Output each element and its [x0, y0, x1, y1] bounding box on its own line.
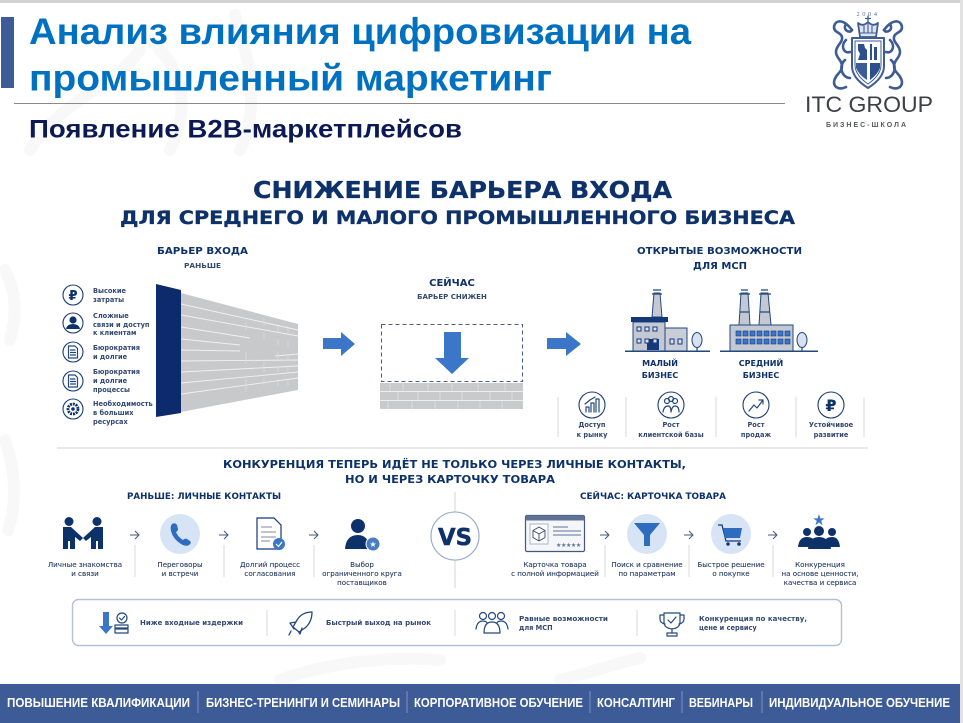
icon: team with star	[798, 511, 840, 549]
icon: funnel	[627, 514, 667, 554]
barrier list: связи и доступ	[93, 321, 149, 329]
now heading: СЕЙЧАС	[429, 276, 475, 289]
icon: medium factory	[720, 290, 818, 352]
dashed outline of old barrier	[382, 324, 522, 382]
panel: before, personal contacts	[48, 492, 402, 587]
small business label: БИЗНЕС	[642, 371, 678, 380]
benefits row: ₽	[825, 396, 837, 415]
step captions: качества и сервиса	[784, 578, 856, 587]
step captions: поставщиков	[337, 578, 387, 587]
step captions: согласования	[244, 569, 296, 578]
footer bar	[0, 684, 960, 723]
logo: ITC GROUP: ITC GROUP	[805, 92, 933, 117]
text: lower costs: Ниже входные издержки	[140, 619, 243, 627]
text: equal opportunities: Равные возможности	[519, 615, 608, 623]
step captions: Конкуренция	[795, 560, 845, 569]
step captions: о покупке	[712, 569, 750, 578]
VS badge: VS	[438, 525, 472, 551]
low brick wall	[380, 383, 523, 409]
step captions: Карточка товара	[523, 560, 587, 569]
infographic	[48, 176, 868, 646]
step separators	[605, 545, 773, 577]
panel: now, product card	[511, 490, 858, 587]
benefits row: Доступ	[578, 421, 606, 429]
footer bar: ИНДИВИДУАЛЬНОЕ ОБУЧЕНИЕ	[769, 696, 950, 710]
step separators	[135, 545, 314, 577]
text: quality competition: цене и сервису	[699, 624, 757, 632]
opportunities heading: ОТКРЫТЫЕ ВОЗМОЖНОСТИ	[637, 246, 802, 257]
step captions: и связи	[71, 569, 99, 578]
benefits row: Устойчивое	[809, 421, 854, 429]
benefits row: Рост	[662, 421, 680, 429]
competition heading: КОНКУРЕНЦИЯ ТЕПЕРЬ ИДЁТ НЕ ТОЛЬКО ЧЕРЕЗ ЛИЧНЫЕ КОНТАКТЫ,	[223, 457, 686, 471]
background watermark	[5, 15, 640, 680]
infographic panel	[26, 162, 870, 652]
logo: ITC GROUP	[805, 11, 933, 129]
barrier list: Высокие	[93, 287, 127, 295]
competition heading: НО И ЧЕРЕЗ КАРТОЧКУ ТОВАРА	[345, 474, 556, 486]
step captions: Быстрое решение	[697, 560, 765, 569]
logo: ITC GROUP: 2004	[856, 11, 880, 18]
footer bar: ПОВЫШЕНИЕ КВАЛИФИКАЦИИ	[7, 696, 190, 710]
icon: product card window: ★★★★★	[556, 542, 581, 549]
icon: phone	[160, 514, 200, 554]
right edge	[960, 0, 963, 723]
arrow: before to now	[323, 332, 355, 356]
benefits row	[558, 392, 864, 439]
barrier list: и долгие	[93, 353, 128, 361]
section divider	[57, 447, 868, 449]
icon: equal opportunities	[476, 612, 508, 633]
barrier list: в больших	[93, 409, 134, 417]
benefits row: развитие	[814, 431, 849, 439]
step captions: Долгий процесс	[240, 560, 300, 569]
subtitle: Появление B2B-маркетплейсов	[29, 116, 462, 144]
barrier list: процессы	[93, 386, 130, 394]
arrow: now to opportunities	[547, 332, 581, 356]
footer bar: КОРПОРАТИВНОЕ ОБУЧЕНИЕ	[414, 696, 583, 710]
benefits row: Рост	[747, 421, 765, 429]
before heading: РАНЬШЕ: ЛИЧНЫЕ КОНТАКТЫ	[127, 492, 281, 502]
barrier list: Сложные	[93, 312, 129, 320]
panel: barrier now	[380, 276, 523, 409]
summary box	[72, 600, 842, 646]
benefits row: клиентской базы	[638, 431, 704, 439]
barrier sublabel: РАНЬШЕ	[184, 261, 221, 270]
panel: barrier before	[63, 246, 298, 426]
benefits row: продаж	[741, 431, 772, 439]
step captions: Поиск и сравнение	[611, 560, 683, 569]
barrier list	[63, 285, 153, 426]
step captions: ограниченного круга	[322, 569, 402, 578]
opportunities heading line 2: ДЛЯ МСП	[693, 261, 747, 272]
barrier list: ₽	[68, 289, 78, 304]
icon: team with star: ★	[812, 511, 826, 529]
logo: ITC GROUP: БИЗНЕС-ШКОЛА	[826, 122, 906, 129]
text: fast market entry: Быстрый выход на рынок	[326, 619, 432, 627]
flow arrows	[600, 531, 777, 539]
step captions: по параметрам	[618, 569, 676, 578]
barrier list: и долгие	[93, 377, 128, 385]
VS badge	[431, 492, 479, 588]
barrier list: ресурсах	[93, 418, 128, 426]
small business label: МАЛЫЙ	[642, 357, 678, 368]
panel: open opportunities	[558, 246, 864, 439]
medium business label: СРЕДНИЙ	[739, 357, 783, 368]
step captions: с полной информацией	[511, 569, 599, 578]
icon: handshake	[63, 517, 103, 549]
step captions: Личные знакомства	[48, 560, 122, 569]
step captions: Переговоры	[157, 560, 203, 569]
footer bar: ВЕБИНАРЫ	[689, 696, 753, 710]
barrier list: затраты	[93, 296, 124, 304]
barrier list: Бюрократия	[93, 344, 140, 352]
footer bar: БИЗНЕС-ТРЕНИНГИ И СЕМИНАРЫ	[206, 696, 400, 710]
icon: product card window	[526, 516, 584, 552]
icon: trophy	[660, 613, 684, 636]
text: equal opportunities: для МСП	[519, 624, 553, 632]
icon: rocket	[289, 612, 312, 635]
title: Анализ влияния цифровизации на	[29, 11, 691, 52]
icon: person with star	[345, 519, 380, 551]
benefits row: к рынку	[577, 431, 608, 439]
barrier heading: БАРЬЕР ВХОДА	[157, 246, 248, 257]
flow arrows	[130, 531, 318, 539]
infographic title: СНИЖЕНИЕ БАРЬЕРА ВХОДА	[253, 176, 673, 204]
arrow: barrier lowered	[435, 332, 469, 374]
infographic title: ДЛЯ СРЕДНЕГО И МАЛОГО ПРОМЫШЛЕННОГО БИЗНЕСА	[120, 208, 796, 229]
icon: cart	[711, 514, 751, 554]
brick wall	[156, 284, 298, 417]
now heading: СЕЙЧАС: КАРТОЧКА ТОВАРА	[580, 490, 726, 502]
header accent bar	[1, 17, 14, 88]
now sublabel: БАРЬЕР СНИЖЕН	[417, 293, 487, 301]
header divider	[14, 103, 785, 104]
text: quality competition: Конкуренция по качеству,	[699, 615, 807, 623]
footer bar: КОНСАЛТИНГ	[597, 696, 675, 710]
icon: lower costs	[99, 612, 128, 634]
icon: small factory	[625, 290, 710, 352]
medium business label: БИЗНЕС	[743, 371, 779, 380]
step captions: и встречи	[162, 569, 198, 578]
icon: person with star: ★	[369, 540, 377, 549]
step captions: на основе ценности,	[782, 569, 858, 578]
barrier list: Необходимость	[93, 400, 153, 408]
barrier list: к клиентам	[93, 329, 136, 337]
icon: document	[257, 518, 285, 550]
step captions: Выбор	[350, 560, 374, 569]
barrier list: Бюрократия	[93, 368, 140, 376]
competition heading	[223, 457, 686, 486]
title: промышленный маркетинг	[29, 58, 552, 98]
infographic title	[120, 176, 796, 229]
top edge	[0, 0, 963, 3]
